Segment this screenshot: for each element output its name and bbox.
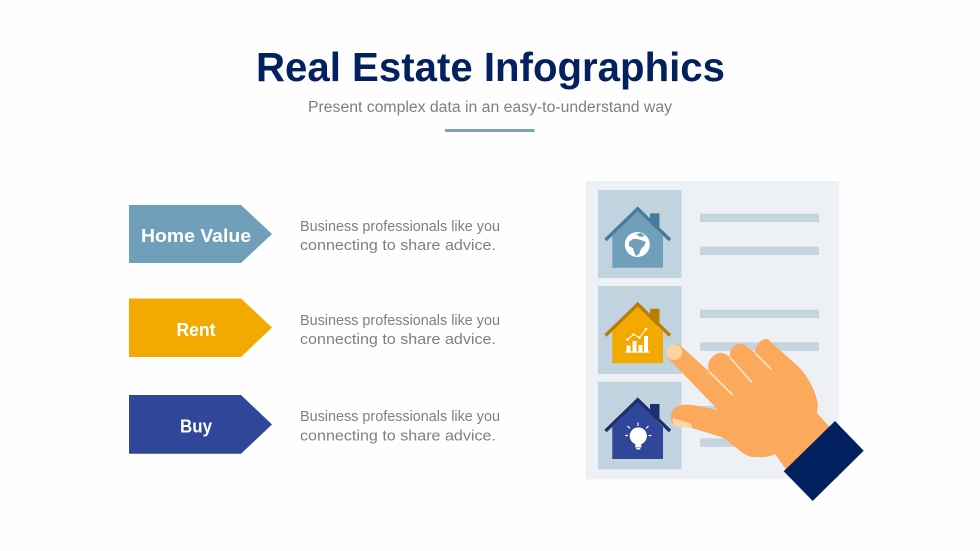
text lines (700, 214, 819, 447)
sleeve cuff (784, 421, 864, 501)
thumbnail (672, 418, 692, 428)
icon: pointing hand (666, 339, 864, 501)
document sheet (586, 181, 839, 480)
description: buy: connecting to share advice. (300, 428, 496, 444)
tile: rent (598, 286, 682, 374)
row: rent (129, 298, 500, 357)
description: buy: Business professionals like you (300, 409, 500, 425)
arrow: buy (129, 395, 272, 454)
arrow: rent (129, 298, 272, 357)
arrow: home value (129, 205, 272, 263)
label: buy: Buy (180, 416, 213, 436)
description: home value: connecting to share advice. (300, 238, 496, 254)
description: home value: Business professionals like you (300, 219, 500, 235)
hand (667, 339, 836, 478)
tile: home value (598, 190, 682, 278)
title: Real Estate Infographics (256, 44, 725, 90)
icon: house with light bulb (606, 400, 670, 459)
icon: house with globe (606, 209, 670, 268)
description: rent: Business professionals like you (300, 313, 500, 329)
finger creases (709, 353, 771, 395)
row: buy (129, 395, 500, 454)
subtitle: Present complex data in an easy-to-understand way (308, 99, 672, 116)
label: rent: Rent (176, 319, 216, 340)
icon: house with chart (606, 304, 670, 363)
row: home value (129, 205, 500, 263)
tile: buy (598, 382, 682, 469)
index fingernail (666, 344, 682, 360)
panel: document illustration (586, 181, 839, 480)
description: rent: connecting to share advice. (300, 332, 496, 348)
label: home value: Home Value (141, 225, 251, 246)
